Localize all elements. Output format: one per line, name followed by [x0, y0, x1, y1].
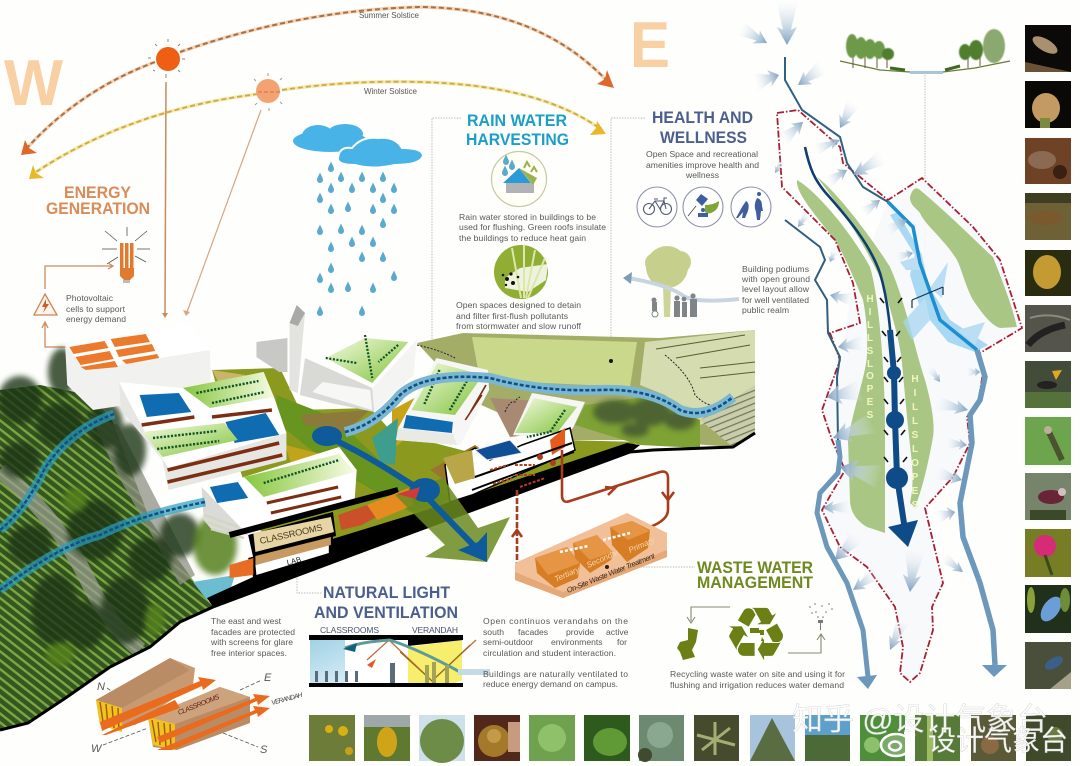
icon: tree and wind — [623, 246, 739, 317]
terrain: upper hillside — [417, 330, 755, 448]
orientation diagram: S — [260, 744, 268, 756]
photo: brown shrub — [971, 715, 1016, 761]
arrow: photovoltaic to bulb — [45, 263, 113, 289]
terrain: trees on hillside — [593, 398, 696, 437]
heading: health and wellness: WELLNESS — [660, 129, 747, 147]
pipe: dashed supply — [512, 490, 534, 578]
text: building podiums: level layout allow — [742, 284, 810, 294]
photo: frog on bark — [1025, 138, 1071, 184]
map: inflow chevrons — [880, 298, 907, 462]
text: east west facades: facades are protected — [211, 627, 295, 637]
photo: bright leaves — [529, 715, 575, 761]
text: verandahs: facades — [518, 627, 548, 637]
text: photovoltaic cells: cells to support — [66, 304, 126, 314]
text: verandahs: for — [617, 637, 627, 647]
heading: health and wellness: HEALTH AND — [652, 109, 753, 127]
heading: natural light and ventilation: NATURAL LIGHT — [323, 584, 450, 602]
map: hillslopes label left: HILLSLOPES — [866, 294, 874, 421]
text: open spaces — [456, 300, 582, 331]
heading: energy generation: ENERGY — [64, 184, 131, 202]
section: right building — [443, 428, 575, 502]
cube: tertiary: Tertiary — [553, 564, 582, 584]
icon: light bulb — [102, 227, 150, 283]
building: wedge block with green roof — [300, 335, 417, 412]
photo: golden frog — [1025, 250, 1071, 296]
text: rain water stored: Rain water stored in buildings to be — [459, 212, 596, 222]
label: treatment: On-Site Waste Water Treatment — [565, 551, 657, 595]
labels: section: VERANDAH — [412, 625, 458, 635]
building: solar roof block — [65, 323, 211, 410]
text: open spaces: Open spaces designed to detain — [456, 300, 581, 310]
labels: section: CLASSROOMS — [320, 625, 379, 635]
text: recycling waste water: flushing and irrigation reduces water demand — [670, 680, 844, 690]
photo: blue bird — [1025, 585, 1071, 633]
photo: yellow daisy — [309, 715, 355, 761]
text: open spaces: from stormwater and slow runoff — [456, 321, 582, 331]
map: upper river — [785, 57, 977, 350]
arrow: olive overland flow — [395, 478, 510, 562]
winter solstice arc — [29, 82, 606, 179]
orientation diagram — [91, 658, 304, 756]
building: hillside block left — [396, 358, 489, 445]
watershed map — [736, 0, 1022, 689]
text: verandahs: semi-outdoor — [483, 637, 533, 647]
photo: civet — [1025, 25, 1071, 72]
heading: natural light and ventilation — [314, 584, 458, 622]
flow arrows between cubes — [560, 533, 630, 552]
heading: waste water management — [697, 559, 813, 592]
photo: dark shrub — [584, 715, 630, 761]
icon: warning voltage — [34, 294, 57, 315]
icon: recycling symbol: ♻ — [723, 592, 789, 678]
building: main block with pools — [119, 372, 286, 490]
river: hillside dashed channel — [345, 377, 733, 432]
map: boundary outline — [777, 110, 1022, 682]
heading: energy generation: GENERATION — [46, 200, 150, 218]
river: forest dashed channels — [0, 414, 205, 590]
photo: lizard — [1025, 193, 1071, 240]
forest — [0, 348, 237, 730]
photo: dark canopy — [1026, 715, 1071, 761]
map: hillslope left — [797, 180, 885, 533]
arrow: panels to warning — [42, 322, 66, 347]
cube: secondary: Secondary — [585, 546, 625, 570]
map: watershed wash — [822, 178, 1022, 682]
text: rain water stored: the buildings to reduce heat gain — [459, 233, 586, 243]
photo: green leaves — [860, 715, 905, 761]
photo: salamander — [1025, 305, 1071, 352]
labels: section — [320, 625, 458, 635]
orientation diagram: E — [264, 672, 272, 684]
letter E: E — [630, 8, 670, 81]
icon: tap in recycling symbol — [750, 628, 764, 641]
text: verandahs: reduce energy demand on campus. — [483, 679, 618, 689]
text: building podiums: for well ventilated — [742, 295, 809, 305]
building: classroom block — [202, 447, 357, 538]
building: hillside block right — [513, 393, 585, 440]
orientation diagram: W — [91, 743, 103, 755]
photo: tree fern — [694, 715, 739, 761]
section: classrooms and lab: LAB — [286, 555, 302, 567]
cube: tertiary — [535, 547, 582, 588]
watermark: weibo logo — [881, 727, 914, 756]
map: stream centerline — [888, 202, 977, 350]
map: hillslopes label right: HILLSLOPES — [911, 374, 919, 511]
map: central drainage arrow — [805, 147, 918, 547]
text: east west facades — [210, 616, 295, 658]
photo: yellow shrub — [364, 715, 410, 761]
summer solstice arc — [21, 7, 614, 155]
terrain: central plaza ground — [212, 368, 640, 560]
orientation diagram: CLASSROOMS — [177, 694, 221, 717]
photo: dark blue bird — [1025, 642, 1071, 689]
icon: filter wetland — [494, 245, 548, 299]
arrow: main blue drainage — [312, 426, 487, 562]
text: recycling waste water — [670, 669, 845, 690]
text: photovoltaic cells: energy demand — [66, 314, 126, 324]
heading: waste water management: WASTE WATER — [697, 559, 813, 577]
arrow: sun to solar panels — [162, 82, 168, 318]
map: hillslope centre — [817, 177, 934, 507]
photo: marsupial — [1025, 81, 1071, 128]
text: rain water stored: used for flushing. Green roofs insulate — [459, 222, 606, 232]
photo: seed pod — [474, 715, 520, 761]
text: recycling waste water: Recycling waste water on site and using it for — [670, 669, 845, 679]
map: wind flow arrows — [736, 0, 980, 653]
text: east west facades: with screens for glare — [210, 637, 293, 647]
photo: leaf stripes — [915, 715, 960, 761]
text: open space: Open Space and recreational — [646, 149, 758, 159]
photo: round tree — [419, 715, 465, 763]
buildings — [65, 305, 489, 578]
watermark: weibo name: 设计气象台 — [928, 725, 1068, 756]
cube: secondary — [573, 535, 625, 573]
arrow: recycling to toilet — [687, 607, 730, 623]
text: verandahs: south — [483, 627, 504, 637]
pipe: recycled water loop — [562, 450, 674, 527]
map: east river arrow — [960, 350, 1007, 677]
label: summer solstice: Summer Solstice — [359, 11, 420, 20]
text: east west facades: free interior spaces. — [211, 648, 287, 658]
arrow: red section arrow — [397, 487, 420, 499]
photo strip: fauna — [1025, 25, 1071, 689]
map: blue stream wash — [890, 212, 988, 352]
heading: rain water harvesting: RAIN WATER — [467, 112, 567, 130]
text: verandahs: Open continuos verandahs on the — [483, 616, 628, 626]
text: open space: amenities improve health and — [646, 160, 759, 170]
icon: winter sun — [254, 73, 282, 111]
icon: bicycle — [637, 187, 677, 227]
photo strip: flora — [309, 715, 1071, 763]
cube: primary: Primary — [627, 535, 657, 555]
arrow: winter sun to solar panels — [183, 110, 261, 316]
cube: primary — [610, 521, 657, 562]
letter W: W — [4, 46, 64, 119]
photo: maroon bird — [1025, 473, 1071, 520]
section: classrooms and lab — [230, 488, 414, 578]
section: classrooms and lab: CLASSROOMS — [259, 522, 323, 546]
text: open space — [646, 149, 759, 180]
icon: toilet — [677, 628, 698, 660]
heading: rain water harvesting — [466, 112, 569, 149]
rain drops — [317, 162, 397, 316]
watermark: zhihu: 知乎 @设计气象台 — [792, 702, 1048, 737]
text: verandahs — [483, 616, 629, 689]
text: open spaces: and filter first-flush pollutants — [456, 311, 568, 321]
text: east west facades: The east and west — [211, 616, 282, 626]
building: grey box — [256, 338, 287, 372]
icon: kite and plant — [683, 187, 723, 227]
label: winter solstice: Winter Solstice — [364, 87, 418, 96]
heading: rain water harvesting: HARVESTING — [466, 131, 569, 149]
text: building podiums: public realm — [742, 305, 789, 315]
map: west river arrow — [785, 220, 877, 689]
photo: pink flower — [1025, 529, 1071, 577]
text: verandahs: environments — [551, 637, 603, 647]
map: hillslope right — [910, 188, 1017, 328]
heading: energy generation — [46, 184, 150, 218]
heading: health and wellness — [652, 109, 753, 147]
text: verandahs: active — [606, 627, 629, 637]
section: river cross section with trees — [840, 29, 1010, 74]
icon: sprinkler — [809, 603, 833, 630]
text: building podiums: with open ground — [741, 274, 810, 284]
treatment plant — [515, 513, 667, 598]
photo: canopy sky — [805, 715, 850, 761]
text: photovoltaic cells: Photovoltaic — [66, 293, 114, 303]
text: verandahs: provide — [566, 627, 594, 637]
orientation diagram: N — [97, 681, 105, 693]
marker dot: open field — [609, 359, 613, 363]
heading: waste water management: MANAGEMENT — [697, 574, 813, 592]
dotted leaders — [297, 75, 925, 593]
text: verandahs: circulation and student interaction. — [483, 648, 616, 658]
text: open space: wellness — [685, 170, 719, 180]
photo: pale foliage — [638, 715, 684, 762]
icon: joggers — [731, 187, 771, 227]
icon: rain clouds — [293, 124, 423, 168]
text: building podiums — [741, 264, 810, 315]
photo: yellow bird — [1025, 361, 1071, 408]
icon: green roof house — [492, 152, 546, 206]
orientation diagram: VERANDAH — [271, 692, 304, 707]
photo: hummingbird — [1025, 417, 1071, 465]
building: grey tower — [290, 305, 305, 393]
text: photovoltaic cells — [66, 293, 126, 324]
text: rain water stored — [459, 212, 606, 243]
heading: natural light and ventilation: AND VENTILATION — [314, 604, 458, 622]
icon: summer sun — [148, 39, 185, 78]
text: verandahs: Buildings are naturally ventilated to — [483, 669, 628, 679]
black ground edge — [0, 433, 755, 730]
text: building podiums: Building podiums — [742, 264, 809, 274]
photo: conifer — [750, 715, 795, 761]
section diagram: natural light — [309, 635, 490, 688]
map: cross-section ticks — [912, 287, 943, 308]
arrow: recycling to sprinkler — [788, 634, 825, 653]
